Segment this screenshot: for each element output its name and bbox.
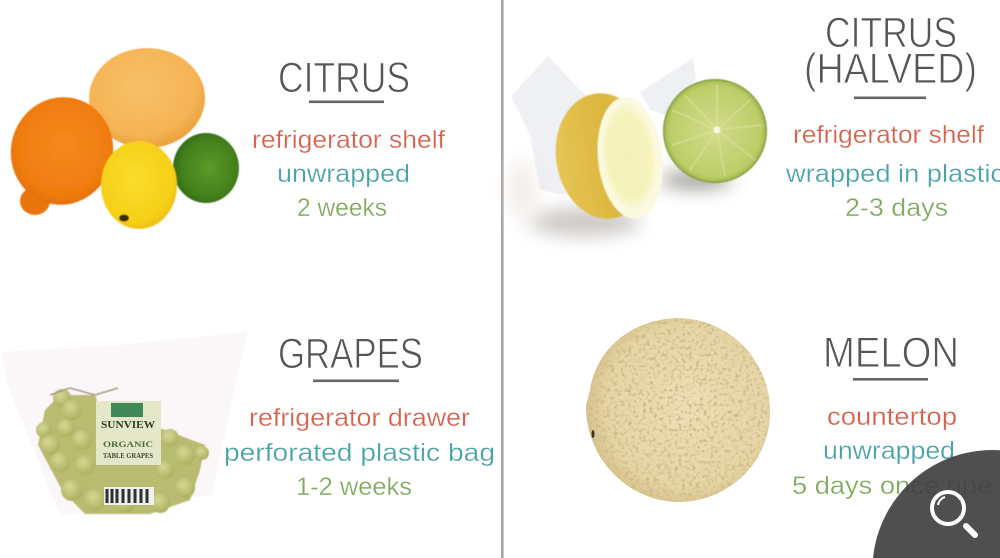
- text: melon duration: 5 days once ripe: [792, 472, 992, 500]
- text: citrus duration: 2 weeks: [297, 194, 387, 222]
- text: citrus location: refrigerator shelf: [252, 126, 445, 154]
- text: halved duration: 2-3 days: [845, 194, 948, 222]
- label: produce tag: ORGANIC: [103, 440, 153, 449]
- text: grapes duration: 1-2 weeks: [296, 473, 412, 501]
- text: halved wrapping: wrapped in plastic: [785, 160, 1000, 188]
- heading: halved: (HALVED): [804, 45, 977, 93]
- text: grapes location: refrigerator drawer: [249, 404, 470, 432]
- label: produce tag: [96, 401, 161, 465]
- zoom button overlay: [873, 450, 1000, 558]
- text: grapes wrapping: perforated plastic bag: [224, 439, 495, 467]
- heading underline: grapes: [313, 380, 399, 382]
- label: produce tag: SUNVIEW: [101, 419, 155, 431]
- heading: melon: MELON: [823, 329, 959, 377]
- heading underline: melon: [853, 378, 928, 381]
- panel: citrus halved: [508, 9, 1000, 236]
- heading underline: citrus halved: [854, 96, 926, 99]
- label: barcode: [104, 487, 154, 505]
- panel: citrus: [0, 48, 445, 229]
- heading underline: citrus: [309, 100, 384, 103]
- panel: melon: [586, 318, 992, 502]
- icon: cantaloupe melon: [586, 318, 770, 502]
- icon: citrus fruits: [0, 48, 239, 229]
- icon: halved lemon and lime in plastic: [508, 56, 767, 236]
- text: halved location: refrigerator shelf: [793, 121, 984, 149]
- vertical divider: [501, 0, 504, 558]
- label: produce tag: TABLE GRAPES: [103, 452, 153, 460]
- text: melon location: countertop: [827, 403, 957, 431]
- panel: grapes: [2, 330, 495, 515]
- icon: magnifying glass: [932, 492, 975, 535]
- heading: citrus halved: CITRUS: [825, 9, 957, 57]
- heading: citrus: CITRUS: [278, 54, 410, 102]
- text: citrus wrapping: unwrapped: [277, 160, 410, 188]
- text: melon wrapping: unwrapped: [823, 437, 955, 465]
- icon: bag of grapes: [2, 332, 247, 515]
- heading: grapes: GRAPES: [278, 330, 423, 378]
